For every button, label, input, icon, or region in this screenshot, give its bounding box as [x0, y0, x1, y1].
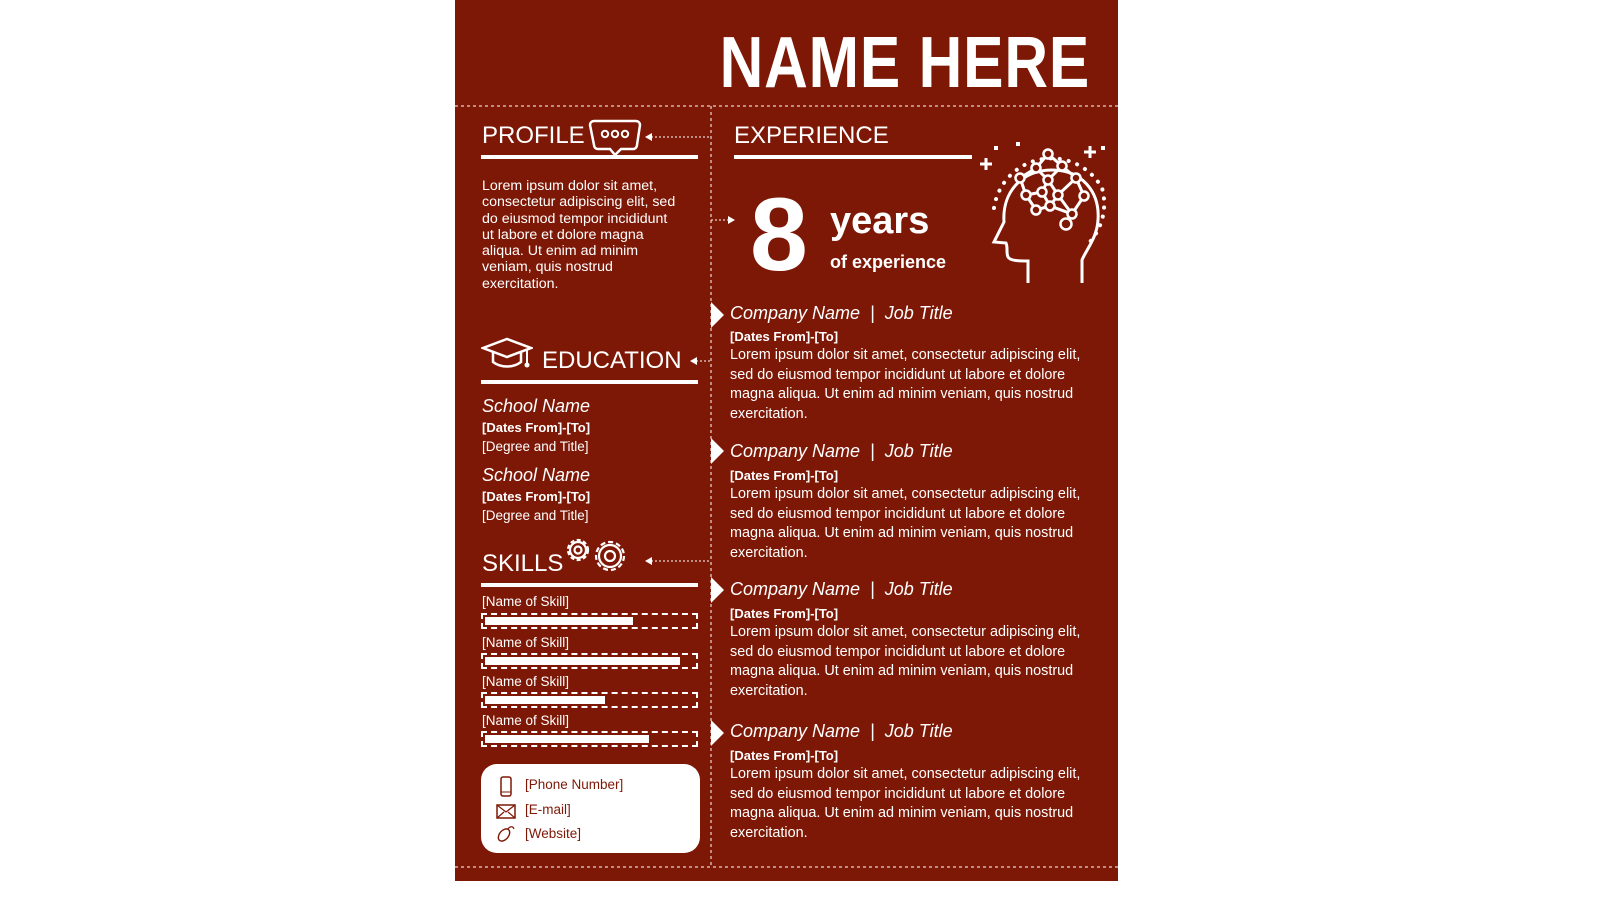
- job 2: exercitation.: [730, 544, 808, 560]
- education entries: School Name: [482, 396, 590, 416]
- job 3: Company Name | Job Title: [730, 579, 953, 599]
- icon: brain head: [980, 142, 1106, 283]
- job 4: [Dates From]-[To]: [730, 748, 838, 763]
- skill bars: [Name of Skill]: [482, 713, 569, 728]
- job 3: Lorem ipsum dolor sit amet, consectetur adipiscing elit,: [730, 624, 1080, 640]
- icon: speech bubble: [588, 120, 642, 155]
- title: NAME HERE: [720, 23, 1090, 103]
- job 4: Lorem ipsum dolor sit amet, consectetur adipiscing elit,: [730, 766, 1080, 782]
- stat: 8 years: years: [830, 200, 929, 242]
- text: profile: exercitation.: [482, 276, 558, 292]
- education entries: [Dates From]-[To]: [482, 420, 590, 435]
- heading: skills: SKILLS: [482, 550, 563, 577]
- education entries: [Degree and Title]: [482, 508, 589, 523]
- skill bars: [481, 594, 698, 747]
- text: profile: veniam, quis nostrud: [482, 259, 613, 275]
- skill bars: [Name of Skill]: [482, 674, 569, 689]
- job 2: sed do eiusmod tempor incididunt ut labore et dolore: [730, 506, 1065, 522]
- icon: graduation cap: [481, 338, 533, 368]
- arrow: to profile: [645, 133, 709, 141]
- job 4: Company Name | Job Title: [730, 721, 953, 741]
- job 2: [Dates From]-[To]: [730, 468, 838, 483]
- job 3: magna aliqua. Ut enim ad minim veniam, quis nostrud: [730, 663, 1073, 679]
- job 1: [Dates From]-[To]: [730, 329, 838, 344]
- contact box: [481, 764, 700, 853]
- job 1: Lorem ipsum dolor sit amet, consectetur adipiscing elit,: [730, 347, 1080, 363]
- skill bars: [Name of Skill]: [482, 594, 569, 609]
- job 2: Company Name | Job Title: [730, 441, 953, 461]
- job 1: exercitation.: [730, 406, 808, 422]
- icon: mail: [496, 804, 516, 819]
- text: profile: consectetur adipiscing elit, sed: [482, 194, 675, 210]
- text: profile: ut labore et dolore magna: [482, 227, 644, 243]
- job 1: Company Name | Job Title: [730, 303, 953, 323]
- heading: profile: PROFILE: [482, 122, 585, 149]
- job 3: [Dates From]-[To]: [730, 606, 838, 621]
- job 4: exercitation.: [730, 824, 808, 840]
- heading: experience: EXPERIENCE: [734, 122, 889, 149]
- icon: gears: [567, 538, 626, 572]
- text: profile: do eiusmod tempor incididunt: [482, 211, 667, 227]
- education entries: School Name: [482, 465, 590, 485]
- heading: education: EDUCATION: [542, 347, 682, 374]
- text: profile: aliqua. Ut enim ad minim: [482, 243, 638, 259]
- arrow: to years: [711, 216, 735, 224]
- contact box: [Website]: [525, 826, 581, 841]
- text: profile: [482, 178, 675, 292]
- job 2: Lorem ipsum dolor sit amet, consectetur adipiscing elit,: [730, 486, 1080, 502]
- stat: 8 years: 8: [750, 177, 808, 293]
- education entries: [Dates From]-[To]: [482, 489, 590, 504]
- stat: 8 years: of experience: [830, 252, 946, 272]
- job 1: sed do eiusmod tempor incididunt ut labore et dolore: [730, 366, 1065, 382]
- arrow: to skills: [645, 557, 709, 565]
- contact box: [E-mail]: [525, 802, 571, 817]
- job 2: [711, 438, 1080, 560]
- panel: resume background: [455, 0, 1118, 881]
- contact box: [Phone Number]: [525, 777, 623, 792]
- job 1: [711, 302, 1080, 422]
- job 1: magna aliqua. Ut enim ad minim veniam, quis nostrud: [730, 386, 1073, 402]
- text: profile: Lorem ipsum dolor sit amet,: [482, 178, 657, 194]
- job entries: [711, 302, 1080, 840]
- job 4: sed do eiusmod tempor incididunt ut labore et dolore: [730, 786, 1065, 802]
- icon: phone: [500, 776, 512, 797]
- icon: mouse: [498, 826, 514, 842]
- job 3: sed do eiusmod tempor incididunt ut labore et dolore: [730, 644, 1065, 660]
- job 3: [711, 577, 1080, 698]
- education entries: [482, 396, 590, 523]
- job 3: exercitation.: [730, 682, 808, 698]
- job 4: [711, 720, 1080, 840]
- job 2: magna aliqua. Ut enim ad minim veniam, quis nostrud: [730, 525, 1073, 541]
- education entries: [Degree and Title]: [482, 439, 589, 454]
- stat: 8 years: [750, 177, 946, 293]
- arrow: to education: [690, 357, 710, 365]
- skill bars: [Name of Skill]: [482, 635, 569, 650]
- job 4: magna aliqua. Ut enim ad minim veniam, quis nostrud: [730, 805, 1073, 821]
